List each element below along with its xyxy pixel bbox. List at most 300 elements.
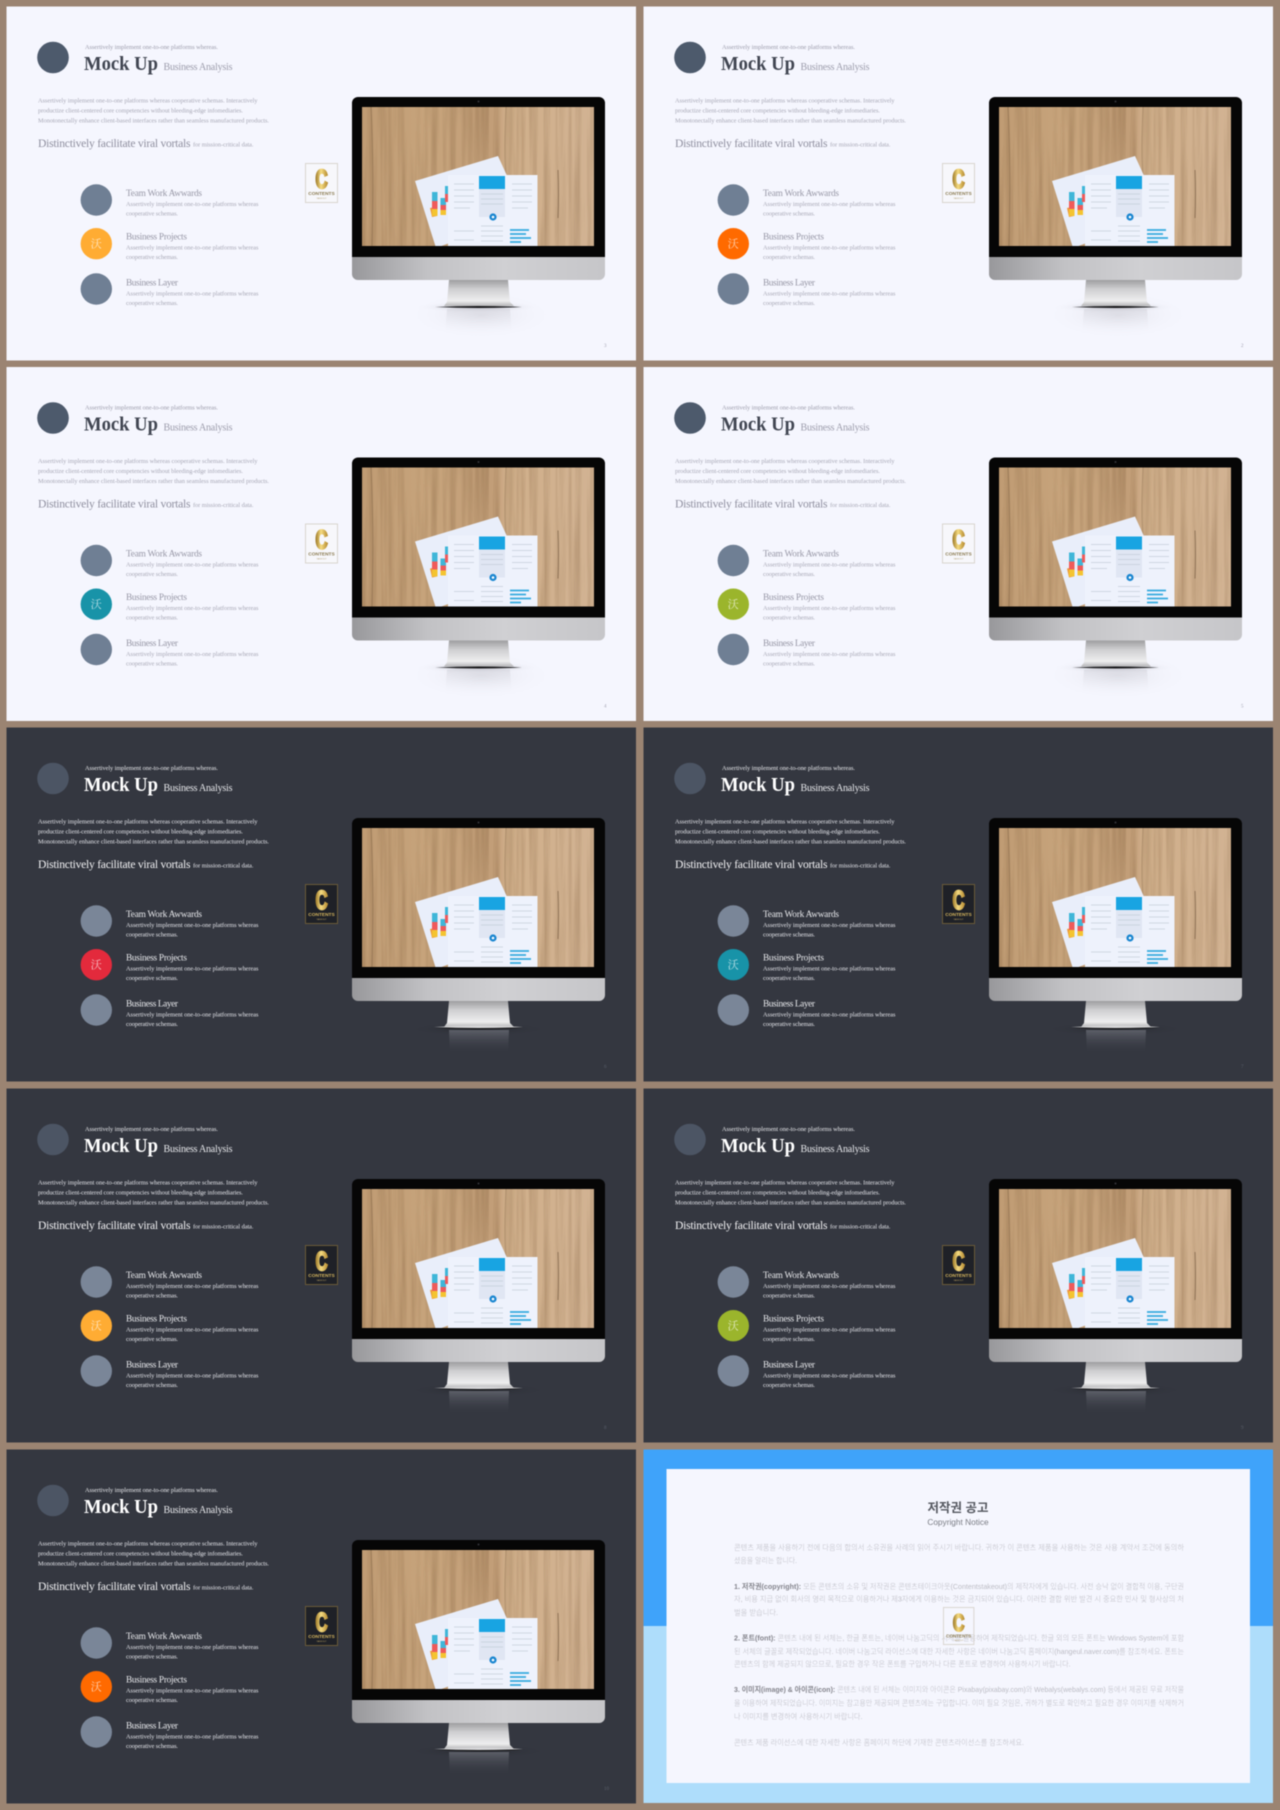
list item: team work: cooperative schemas.: [763, 1293, 815, 1300]
list item: team work: [81, 1266, 259, 1300]
panel: slide 9 dark orange accent: [6, 1450, 636, 1804]
intro text: [38, 819, 269, 845]
tagline: for mission-critical data.: [193, 1584, 254, 1592]
list item: business layer: cooperative schemas.: [126, 1021, 178, 1028]
heading: [84, 765, 233, 796]
list item: business layer: cooperative schemas.: [126, 1382, 178, 1389]
list item: team work: Assertively implement one-to-one platforms whereas: [763, 1283, 896, 1290]
panel: copyright notice slide: [644, 1450, 1273, 1803]
heading: Assertively implement one-to-one platforms whereas.: [85, 44, 218, 51]
intro text: Monotonectally enhance client-based interfaces rather than seamless manufactured products.: [38, 838, 269, 845]
intro text: Assertively implement one-to-one platforms whereas cooperative schemas. Interactively: [38, 98, 258, 105]
list item: business projects: 沃: [91, 1318, 102, 1334]
panel: slide 2 light orange accent: [644, 6, 1273, 360]
intro text: Assertively implement one-to-one platforms whereas cooperative schemas. Interactively: [675, 819, 895, 826]
list item: business projects: cooperative schemas.: [126, 1697, 178, 1704]
list item: business layer: cooperative schemas.: [126, 661, 178, 668]
list item: team work: [718, 545, 896, 578]
list item: business layer: cooperative schemas.: [126, 1743, 178, 1750]
list item: business projects: Assertively implement one-to-one platforms whereas: [126, 244, 259, 251]
logo: C: [315, 1246, 328, 1276]
list item: team work: cooperative schemas.: [763, 211, 815, 218]
heading: [84, 44, 233, 75]
list item: business projects: cooperative schemas.: [126, 614, 178, 622]
intro text: Monotonectally enhance client-based interfaces rather than seamless manufactured products.: [38, 1560, 269, 1567]
list item: business projects: Business Projects: [763, 593, 824, 603]
list item: business layer: [81, 1716, 259, 1750]
notice card: [666, 1469, 1250, 1783]
list item: business projects: Business Projects: [126, 232, 187, 242]
list item: business projects: cooperative schemas.: [126, 975, 178, 982]
list item: business projects: Business Projects: [126, 1675, 187, 1685]
logo: TAKEOUT: [316, 558, 327, 560]
intro text: Assertively implement one-to-one platforms whereas cooperative schemas. Interactively: [38, 1541, 258, 1548]
logo: CONTENTS: [308, 1634, 335, 1640]
page number: 4: [604, 704, 607, 710]
list item: team work: Assertively implement one-to-one platforms whereas: [126, 1283, 259, 1290]
heading: Assertively implement one-to-one platforms whereas.: [85, 1126, 218, 1133]
intro text: Monotonectally enhance client-based interfaces rather than seamless manufactured products.: [675, 117, 906, 124]
page number: 7: [1241, 1065, 1244, 1070]
intro text: productize client-centered core competencies without bleeding-edge infomediaries.: [675, 828, 880, 836]
logo: CONTENTS: [945, 191, 972, 197]
monitor mockup: [352, 1540, 605, 1751]
list item: business layer: [81, 634, 259, 668]
notice logo: [943, 1607, 974, 1645]
list item: business projects: 沃: [728, 236, 739, 252]
tagline: Distinctively facilitate viral vortals: [675, 858, 828, 871]
notice copyright clause: 1. 저작권(copyright): 모든 콘텐츠의 소유 및 저작권은 콘텐츠테이크아웃(Contentstakeout)의 제작자에게 있습니다. 사전 승낙 없이 결합적 이용, 구단권: [734, 1581, 1184, 1591]
list item: business projects: 沃: [728, 957, 739, 973]
list item: business layer: Assertively implement one-to-one platforms whereas: [126, 290, 259, 298]
notice closing line: 콘텐츠 제품 라이선스에 대한 자세한 사항은 홈페이지 하단에 기재한 콘텐츠라이선스를 참조하세요.: [734, 1737, 1024, 1747]
list item: business projects: Business Projects: [763, 232, 824, 242]
intro text: Assertively implement one-to-one platforms whereas cooperative schemas. Interactively: [675, 458, 895, 465]
tagline: Distinctively facilitate viral vortals: [38, 858, 191, 871]
list item: business layer: [81, 994, 259, 1028]
list item: business projects: cooperative schemas.: [763, 254, 815, 261]
list item: business layer: Business Layer: [126, 999, 179, 1009]
heading: [721, 44, 870, 75]
intro text: [38, 458, 269, 485]
list item: business projects: Assertively implement one-to-one platforms whereas: [763, 1326, 896, 1333]
page number: 3: [604, 344, 607, 349]
heading: Mock Up: [721, 774, 795, 796]
tagline: for mission-critical data.: [193, 142, 254, 148]
heading: Business Analysis: [164, 783, 233, 794]
panel: slide 3 light teal accent: [6, 367, 636, 721]
list item: business projects: cooperative schemas.: [763, 975, 815, 982]
header circle: [674, 402, 706, 434]
list item: business layer: Assertively implement one-to-one platforms whereas: [126, 1734, 259, 1740]
intro text: Monotonectally enhance client-based interfaces rather than seamless manufactured products.: [38, 117, 269, 124]
list item: business projects: [718, 1310, 896, 1343]
monitor mockup: [352, 1179, 605, 1390]
notice title: 저작권 공고: [928, 1500, 988, 1515]
logo: C: [952, 164, 965, 194]
list item: team work: Assertively implement one-to-one platforms whereas: [763, 201, 896, 208]
list item: business projects: [81, 228, 259, 261]
monitor mockup: [989, 458, 1242, 668]
logo: [942, 164, 974, 202]
tagline: Distinctively facilitate viral vortals: [38, 137, 191, 150]
page number: 8: [604, 1426, 607, 1431]
heading: Assertively implement one-to-one platforms whereas.: [722, 1126, 855, 1133]
header circle: [37, 763, 69, 794]
heading: [721, 1126, 870, 1157]
heading: Business Analysis: [800, 422, 870, 434]
intro text: productize client-centered core competencies without bleeding-edge infomediaries.: [675, 108, 880, 114]
heading: [84, 1487, 233, 1518]
heading: [721, 404, 870, 436]
list item: business projects: Assertively implement one-to-one platforms whereas: [126, 605, 259, 612]
logo: [942, 884, 974, 924]
intro text: Monotonectally enhance client-based interfaces rather than seamless manufactured products.: [38, 478, 269, 485]
logo: [306, 1246, 338, 1284]
list item: team work: cooperative schemas.: [126, 932, 178, 939]
list item: business layer: Business Layer: [763, 278, 816, 288]
list item: business projects: [81, 949, 259, 982]
monitor mockup: [352, 97, 605, 308]
tagline: for mission-critical data.: [830, 1224, 891, 1230]
logo: C: [315, 1607, 328, 1637]
intro text: Assertively implement one-to-one platforms whereas cooperative schemas. Interactively: [38, 458, 258, 465]
list item: team work: Team Work Awwards: [763, 910, 839, 920]
tagline: for mission-critical data.: [830, 142, 891, 148]
list item: business layer: Business Layer: [126, 278, 179, 288]
tagline: Distinctively facilitate viral vortals: [675, 498, 828, 510]
intro text: productize client-centered core competencies without bleeding-edge infomediaries.: [38, 108, 243, 114]
list item: team work: Team Work Awwards: [763, 1271, 839, 1281]
page number: 6: [604, 1065, 607, 1070]
notice image clause: 나 이미지를 변경하여 사용하시기 바랍니다.: [734, 1711, 862, 1721]
list item: business projects: [81, 1671, 259, 1704]
header circle: [674, 42, 706, 73]
heading: Business Analysis: [164, 1505, 233, 1516]
heading: Mock Up: [84, 1496, 158, 1518]
header circle: [37, 402, 69, 434]
list item: business projects: cooperative schemas.: [763, 1336, 815, 1343]
heading: Assertively implement one-to-one platforms whereas.: [722, 765, 855, 772]
list item: business layer: [81, 1355, 259, 1389]
intro text: [675, 98, 906, 124]
intro text: [675, 458, 906, 485]
intro text: [675, 819, 906, 845]
list item: business layer: cooperative schemas.: [763, 1021, 815, 1028]
heading: Mock Up: [721, 1135, 795, 1157]
list item: team work: Team Work Awwards: [763, 189, 839, 199]
list item: business projects: [81, 1310, 259, 1343]
tagline: Distinctively facilitate viral vortals: [675, 137, 828, 150]
list item: business projects: [718, 949, 896, 982]
logo: [942, 524, 974, 563]
notice image clause: 을 이용하여 제작되었습니다. 이미지는 참고용만 제공되며 콘텐츠에는 구입합니다. 이미 필요 것임은, 귀하가 별도로 확인하고 필요한 경우 이미지를 삭제하거: [734, 1698, 1184, 1708]
heading: Mock Up: [84, 53, 158, 75]
list item: business layer: [718, 1355, 896, 1389]
list item: business projects: Business Projects: [126, 593, 187, 603]
list item: business projects: [81, 588, 259, 622]
list item: business layer: [718, 994, 896, 1028]
notice intro: 콘텐츠 제품을 사용하기 전에 다음의 합의서 소유권을 사례의 읽어 주시기 바랍니다. 귀하가 이 콘텐츠 제품을 사용하는 것은 사용 계약서 조건에 동의하: [734, 1542, 1184, 1552]
intro text: Monotonectally enhance client-based interfaces rather than seamless manufactured products.: [675, 1199, 906, 1206]
logo: C: [952, 885, 965, 915]
panel: slide 7 dark yellow accent: [6, 1088, 636, 1442]
logo: CONTENTS: [945, 552, 972, 558]
list item: business projects: cooperative schemas.: [126, 254, 178, 261]
header circle: [674, 763, 706, 794]
heading: Business Analysis: [164, 62, 233, 73]
intro text: [38, 98, 269, 124]
list item: business layer: Assertively implement one-to-one platforms whereas: [763, 290, 896, 298]
heading: Mock Up: [721, 53, 795, 75]
logo: CONTENTS: [308, 1273, 335, 1279]
notice title: [927, 1500, 989, 1527]
notice image clause: 3. 이미지(image) & 아이콘(icon): 콘텐츠 내에 된 서체는 이미지와 아이콘은 Pixabay(pixabay.com)와 Webalys(webalys.com) 등에서 제공된 무료 저작물: [734, 1684, 1184, 1694]
logo: TAKEOUT: [953, 918, 964, 921]
list item: team work: Team Work Awwards: [126, 1271, 202, 1281]
logo: C: [315, 525, 328, 554]
heading: Assertively implement one-to-one platforms whereas.: [722, 44, 855, 51]
notice logo: C: [953, 1609, 965, 1637]
logo: TAKEOUT: [316, 197, 327, 200]
intro text: [38, 1541, 269, 1567]
list item: business projects: cooperative schemas.: [126, 1336, 178, 1343]
notice logo: TAKEOUT: [954, 1639, 964, 1642]
heading: [84, 1126, 233, 1157]
heading: Assertively implement one-to-one platforms whereas.: [85, 1487, 218, 1494]
list item: team work: Team Work Awwards: [763, 550, 839, 560]
list item: team work: Team Work Awwards: [126, 910, 202, 920]
panel: slide 1 light yellow accent: [6, 6, 636, 360]
page number: 9: [1241, 1426, 1244, 1431]
list item: team work: cooperative schemas.: [763, 932, 815, 939]
monitor mockup: [989, 818, 1242, 1029]
logo: TAKEOUT: [316, 1640, 327, 1643]
intro text: productize client-centered core competencies without bleeding-edge infomediaries.: [675, 468, 880, 475]
tagline: Distinctively facilitate viral vortals: [38, 1580, 191, 1593]
list item: business projects: Assertively implement one-to-one platforms whereas: [763, 965, 896, 972]
list item: business projects: Business Projects: [763, 1314, 824, 1324]
page number: 5: [1241, 704, 1244, 710]
monitor mockup: [352, 458, 605, 668]
logo: CONTENTS: [945, 912, 972, 918]
heading: Assertively implement one-to-one platforms whereas.: [722, 404, 855, 412]
notice font clause: 2. 폰트(font): 콘텐츠 내에 된 서체는, 한글 폰트는, 네이버 나눔고딕의 서체를 활용하여 제작되었습니다. 한글 외의 모든 폰트는 Windows System에 포함: [734, 1632, 1184, 1642]
monitor mockup: [989, 97, 1242, 308]
logo: C: [952, 1246, 965, 1276]
notice logo: CONTENTS: [946, 1633, 971, 1638]
list item: business layer: cooperative schemas.: [763, 1382, 815, 1389]
list item: team work: [718, 905, 896, 939]
list item: business layer: cooperative schemas.: [126, 300, 178, 307]
tagline: Distinctively facilitate viral vortals: [38, 1219, 191, 1232]
logo: TAKEOUT: [316, 1279, 327, 1282]
list item: business layer: Assertively implement one-to-one platforms whereas: [126, 1012, 259, 1018]
intro text: Assertively implement one-to-one platforms whereas cooperative schemas. Interactively: [675, 98, 895, 105]
list item: team work: [81, 184, 259, 218]
list item: team work: cooperative schemas.: [126, 211, 178, 218]
intro text: productize client-centered core competencies without bleeding-edge infomediaries.: [38, 1190, 243, 1196]
list item: team work: Team Work Awwards: [126, 1632, 202, 1642]
heading: Business Analysis: [164, 422, 233, 434]
tagline: for mission-critical data.: [193, 1224, 254, 1230]
list item: team work: Assertively implement one-to-one platforms whereas: [763, 562, 896, 568]
list item: team work: cooperative schemas.: [763, 571, 815, 578]
list item: business layer: Business Layer: [126, 1721, 179, 1731]
list item: business projects: Assertively implement one-to-one platforms whereas: [126, 1326, 259, 1333]
list item: business layer: Business Layer: [126, 1360, 179, 1370]
intro text: [675, 1180, 906, 1206]
notice copyright clause: 벌을 받습니다.: [734, 1608, 778, 1617]
notice intro: [734, 1542, 1184, 1565]
list item: team work: Assertively implement one-to-one platforms whereas: [126, 922, 259, 929]
list item: business layer: Assertively implement one-to-one platforms whereas: [126, 651, 259, 658]
intro text: productize client-centered core competencies without bleeding-edge infomediaries.: [38, 468, 243, 475]
list item: business projects: Assertively implement one-to-one platforms whereas: [763, 244, 896, 251]
list item: team work: [81, 545, 259, 578]
list item: team work: [81, 1627, 259, 1661]
list item: team work: cooperative schemas.: [126, 571, 178, 578]
intro text: Monotonectally enhance client-based interfaces rather than seamless manufactured products.: [675, 478, 906, 485]
heading: [721, 765, 870, 796]
heading: Assertively implement one-to-one platforms whereas.: [85, 765, 218, 772]
intro text: Monotonectally enhance client-based interfaces rather than seamless manufactured products.: [38, 1199, 269, 1206]
list item: business layer: cooperative schemas.: [763, 300, 815, 307]
list item: business projects: Business Projects: [126, 1314, 187, 1324]
tagline: for mission-critical data.: [830, 502, 891, 509]
list item: team work: Assertively implement one-to-one platforms whereas: [763, 922, 896, 929]
list item: business layer: [718, 634, 896, 668]
logo: C: [315, 164, 328, 194]
logo: [306, 524, 338, 563]
monitor mockup: [989, 1179, 1242, 1390]
logo: CONTENTS: [308, 912, 335, 918]
list item: business projects: [718, 228, 896, 261]
logo: [306, 884, 338, 924]
logo: CONTENTS: [945, 1273, 972, 1279]
logo: C: [315, 885, 328, 915]
list item: team work: cooperative schemas.: [126, 1293, 178, 1300]
logo: TAKEOUT: [953, 1279, 964, 1282]
panel: slide 5 dark red accent: [6, 728, 636, 1082]
intro text: Assertively implement one-to-one platforms whereas cooperative schemas. Interactively: [38, 1180, 258, 1187]
notice font clause: 된 서체의 글꼴로 제작되었습니다. 네이버 나눔고딕 라이선스에 대한 자세한 사항은 네이버 나눔고딕 홈페이지(hangeul.naver.com)를 참조하세요. 폰트는: [734, 1646, 1184, 1656]
intro text: Monotonectally enhance client-based interfaces rather than seamless manufactured products.: [675, 838, 906, 845]
header circle: [37, 42, 69, 73]
tagline: for mission-critical data.: [830, 862, 891, 870]
logo: TAKEOUT: [953, 197, 964, 200]
list item: business layer: Assertively implement one-to-one platforms whereas: [763, 651, 896, 658]
list item: business layer: Business Layer: [126, 639, 179, 649]
list item: business projects: [718, 588, 896, 622]
list item: business projects: Assertively implement one-to-one platforms whereas: [126, 1687, 259, 1694]
list item: business projects: 沃: [91, 1679, 102, 1695]
monitor mockup: [352, 818, 605, 1029]
intro text: productize client-centered core competencies without bleeding-edge infomediaries.: [38, 1550, 243, 1558]
heading: Mock Up: [84, 774, 158, 796]
notice copyright clause: [734, 1581, 1184, 1617]
list item: business projects: cooperative schemas.: [763, 614, 815, 622]
list item: business projects: Business Projects: [126, 953, 187, 963]
list item: team work: [81, 905, 259, 939]
list item: business projects: 沃: [728, 596, 739, 612]
heading: Mock Up: [84, 1135, 158, 1157]
logo: C: [952, 525, 965, 554]
list item: business projects: Business Projects: [763, 953, 824, 963]
intro text: productize client-centered core competencies without bleeding-edge infomediaries.: [675, 1190, 880, 1196]
intro text: [38, 1180, 269, 1206]
panel: slide 8 dark green accent: [644, 1088, 1273, 1442]
tagline: Distinctively facilitate viral vortals: [675, 1219, 828, 1232]
intro text: productize client-centered core competencies without bleeding-edge infomediaries.: [38, 828, 243, 836]
list item: team work: [718, 1266, 896, 1300]
list item: business layer: Business Layer: [763, 1360, 816, 1370]
tagline: for mission-critical data.: [193, 862, 254, 870]
list item: business layer: [718, 273, 896, 307]
heading: Business Analysis: [164, 1144, 233, 1155]
page number: 2: [1241, 344, 1244, 349]
heading: Business Analysis: [800, 783, 870, 794]
list item: business projects: 沃: [91, 596, 102, 612]
notice font clause: [734, 1632, 1184, 1668]
logo: CONTENTS: [308, 552, 335, 558]
list item: business projects: 沃: [91, 957, 102, 973]
header circle: [37, 1485, 69, 1516]
panel: slide 4 light green accent: [644, 367, 1273, 721]
logo: CONTENTS: [308, 191, 335, 197]
list item: team work: Team Work Awwards: [126, 189, 202, 199]
list item: business projects: 沃: [728, 1318, 739, 1334]
logo: TAKEOUT: [953, 558, 964, 560]
heading: Assertively implement one-to-one platforms whereas.: [85, 404, 218, 412]
heading: Business Analysis: [800, 1144, 870, 1155]
list item: business projects: 沃: [91, 236, 102, 252]
notice title: Copyright Notice: [927, 1517, 989, 1527]
logo: [306, 1606, 338, 1646]
logo: TAKEOUT: [316, 918, 327, 921]
list item: team work: Assertively implement one-to-one platforms whereas: [126, 1644, 259, 1651]
list item: business layer: Business Layer: [763, 999, 816, 1009]
list item: business layer: Assertively implement one-to-one platforms whereas: [763, 1372, 896, 1380]
notice intro: 셨음을 알리는 합니다.: [734, 1556, 797, 1565]
list item: business projects: Assertively implement one-to-one platforms whereas: [126, 965, 259, 972]
header circle: [674, 1124, 706, 1155]
list item: business layer: Business Layer: [763, 639, 816, 649]
list item: business projects: Assertively implement one-to-one platforms whereas: [763, 605, 896, 612]
notice copyright clause: 자, 비용 지급 없이 회사의 영리 목적으로 이용하거나 제3자에게 이용하는 것은 금지되어 있습니다. 이러한 결합 위반 발견 시 중요한 민사 및 형사상의 처: [734, 1594, 1184, 1604]
list item: team work: Team Work Awwards: [126, 550, 202, 560]
heading: Mock Up: [84, 414, 158, 436]
list item: business layer: Assertively implement one-to-one platforms whereas: [126, 1372, 259, 1380]
list item: team work: Assertively implement one-to-one platforms whereas: [126, 562, 259, 568]
header circle: [37, 1124, 69, 1155]
panel: slide 6 dark teal accent: [644, 728, 1273, 1082]
intro text: Assertively implement one-to-one platforms whereas cooperative schemas. Interactively: [675, 1180, 895, 1187]
tagline: Distinctively facilitate viral vortals: [38, 498, 191, 510]
list item: team work: cooperative schemas.: [126, 1654, 178, 1661]
notice image clause: [734, 1684, 1184, 1721]
list item: team work: Assertively implement one-to-one platforms whereas: [126, 201, 259, 208]
heading: Mock Up: [721, 414, 795, 436]
list item: business layer: cooperative schemas.: [763, 661, 815, 668]
logo: [942, 1246, 974, 1284]
intro text: Assertively implement one-to-one platforms whereas cooperative schemas. Interactively: [38, 819, 258, 826]
heading: [84, 404, 233, 436]
tagline: for mission-critical data.: [193, 502, 254, 509]
heading: Business Analysis: [800, 62, 870, 73]
logo: [306, 164, 338, 202]
list item: business layer: [81, 273, 259, 307]
